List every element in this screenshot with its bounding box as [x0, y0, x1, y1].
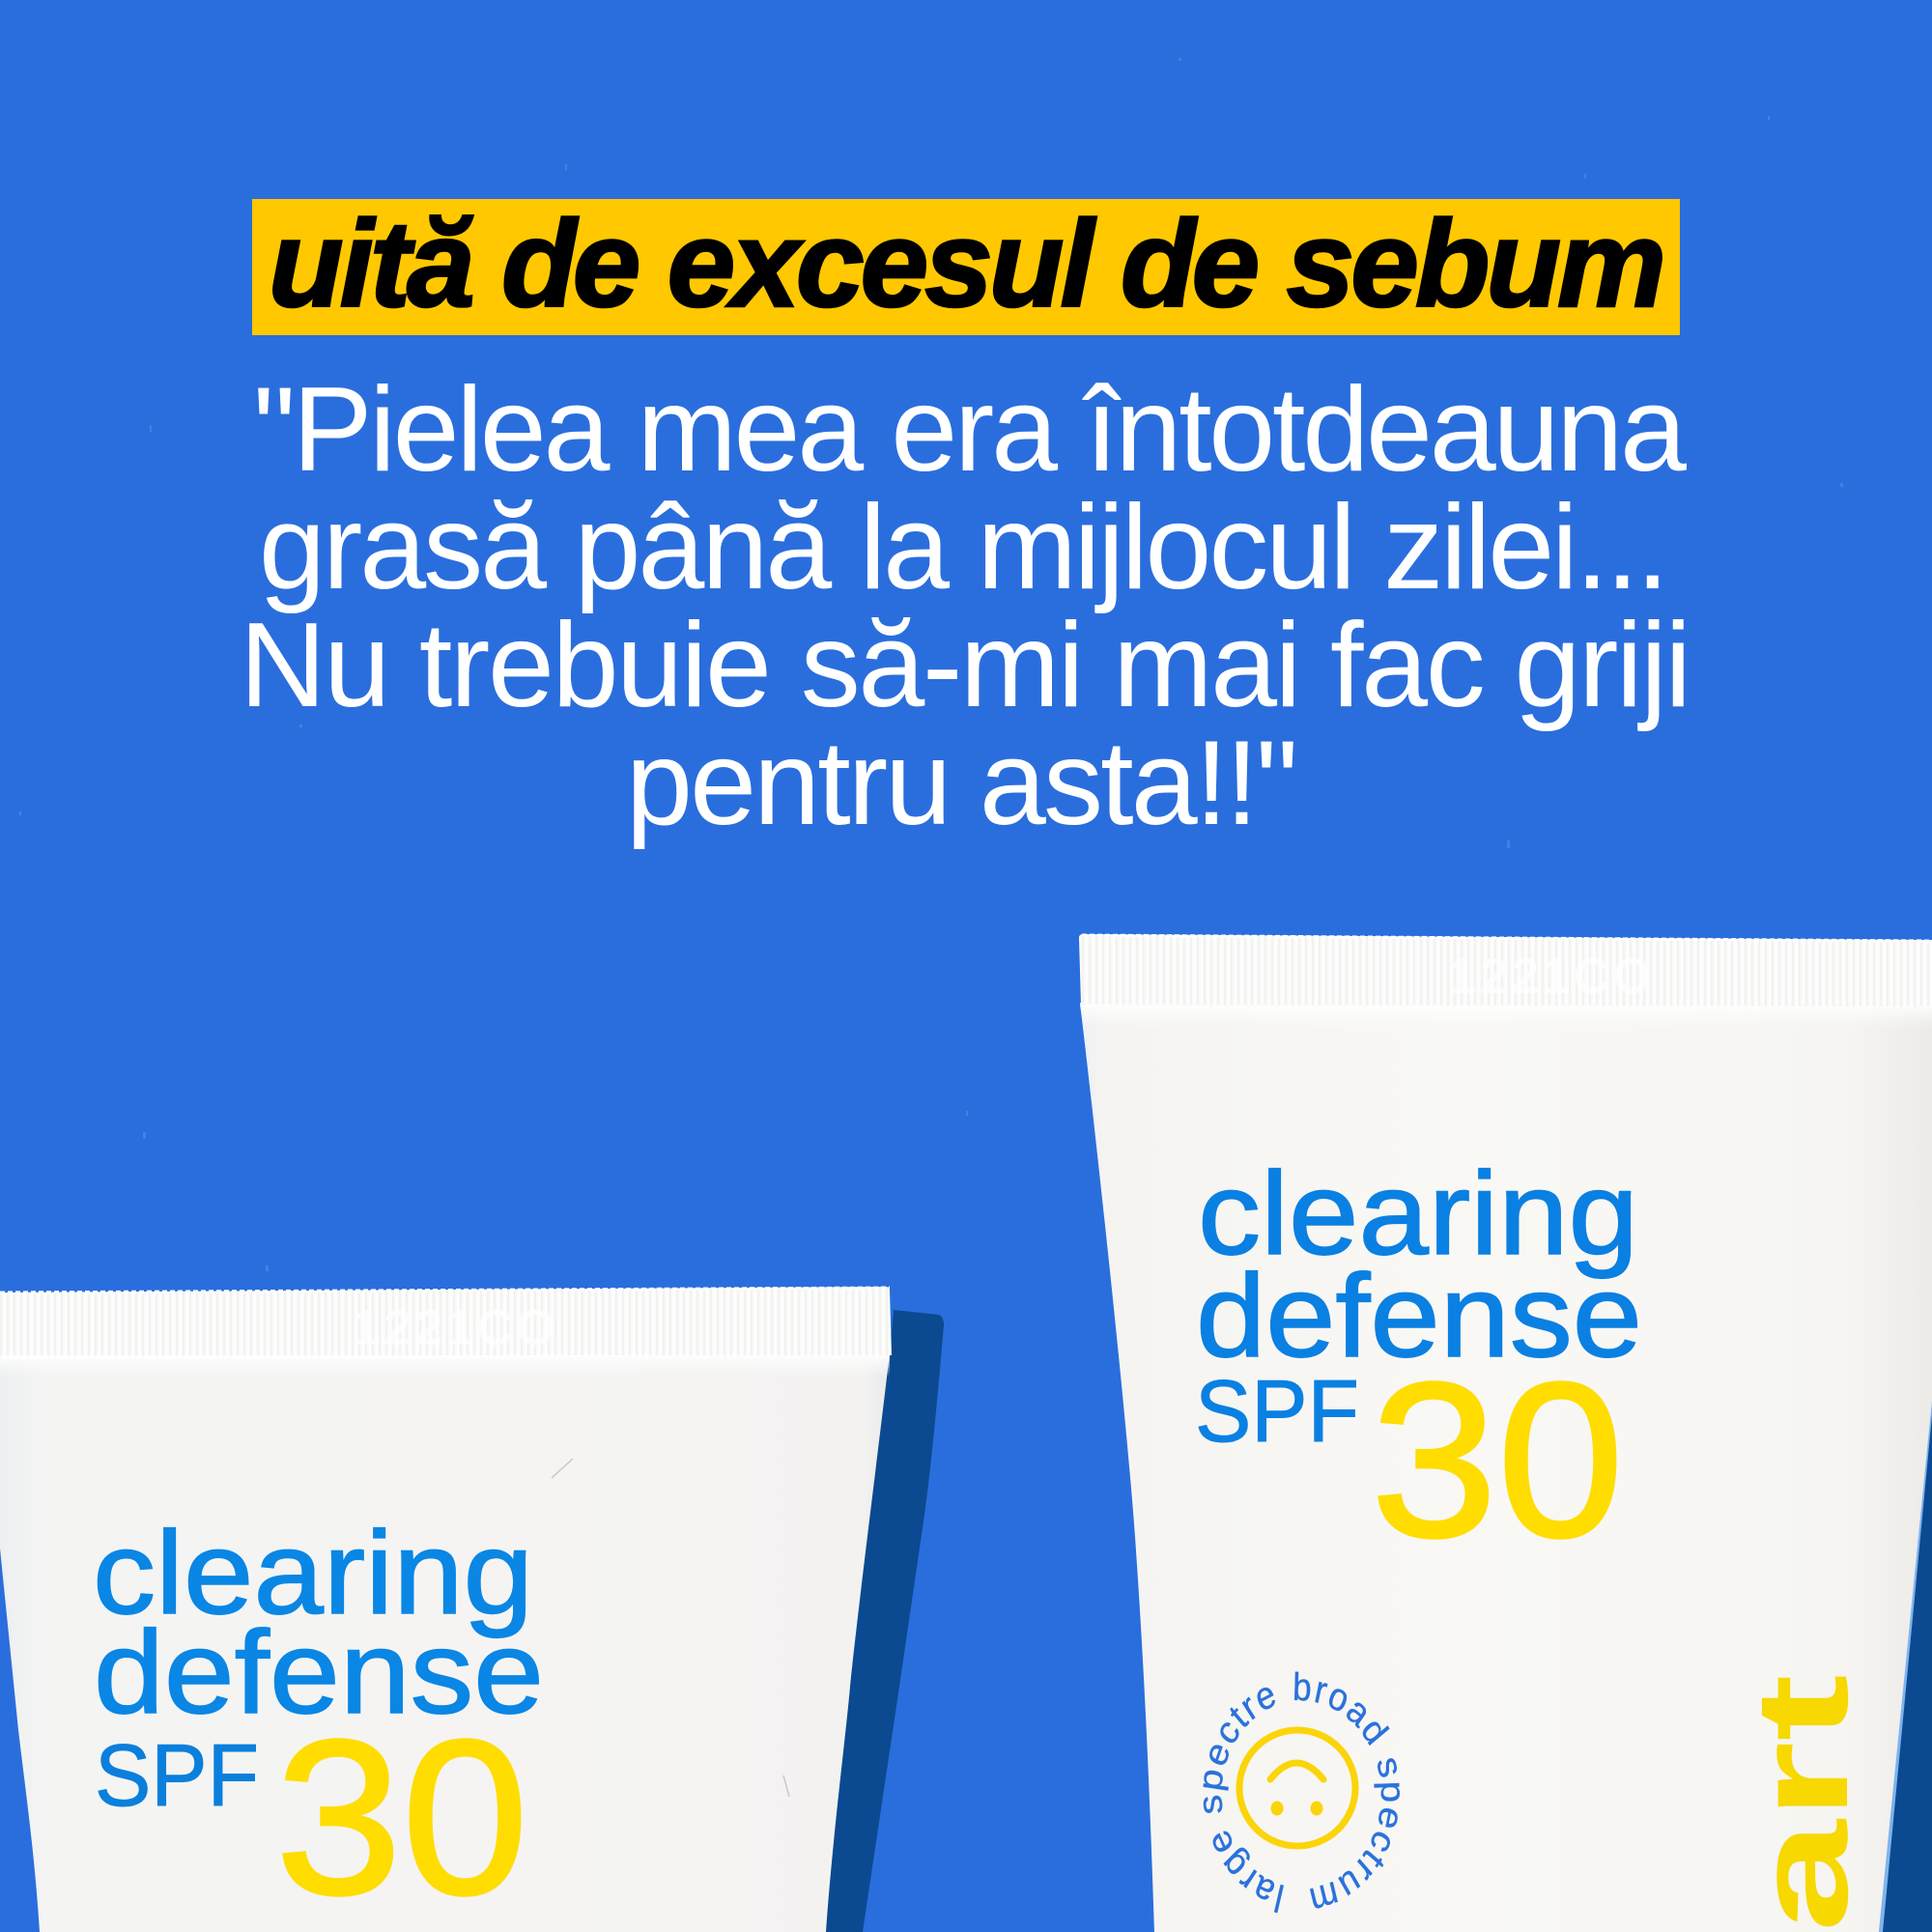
testimonial quote: "Pielea mea era întotdeauna [253, 363, 1687, 497]
product tube: right [1079, 933, 1932, 1932]
product name: defense [1196, 1250, 1642, 1381]
testimonial quote [240, 363, 1691, 850]
SPF number: 30 [1371, 1338, 1624, 1583]
product name [93, 1507, 544, 1738]
circular label: large spectre [1204, 1687, 1284, 1913]
heading text: uită de excesul de sebum [269, 195, 1662, 332]
tube body [1080, 1003, 1932, 1932]
broad spectrum badge [1204, 1671, 1401, 1913]
tube body [0, 1352, 890, 1932]
embossed code: 1221CO [353, 1300, 555, 1356]
left tube shadow [821, 1310, 944, 1932]
smiley icon [1239, 1730, 1355, 1846]
SPF label: SPF [1195, 1363, 1359, 1461]
product name: defense [94, 1606, 544, 1738]
product name [1196, 1148, 1642, 1381]
product name: clearing [93, 1507, 533, 1638]
right tube shadow [1879, 1401, 1932, 1932]
product name: clearing [1198, 1148, 1638, 1279]
testimonial quote: grasă până la mijlocul zilei... [259, 481, 1669, 614]
testimonial quote: pentru asta!!" [626, 717, 1298, 850]
heading highlight [252, 195, 1680, 335]
SPF label: SPF [95, 1727, 259, 1825]
scratches [552, 1459, 789, 1797]
vertical brand word: art [1730, 1674, 1875, 1932]
tube edge highlight [1879, 1396, 1932, 1932]
circular label [1204, 1671, 1401, 1913]
circular label: broad spectrum [1294, 1671, 1401, 1909]
crimped seal [0, 1287, 892, 1360]
product tube: left [0, 1287, 892, 1932]
crimped seal [1079, 934, 1932, 1007]
heading background bar [252, 199, 1680, 335]
testimonial quote: Nu trebuie să-mi mai fac griji [240, 599, 1691, 732]
embossed code: 1221CO [1449, 949, 1652, 1005]
